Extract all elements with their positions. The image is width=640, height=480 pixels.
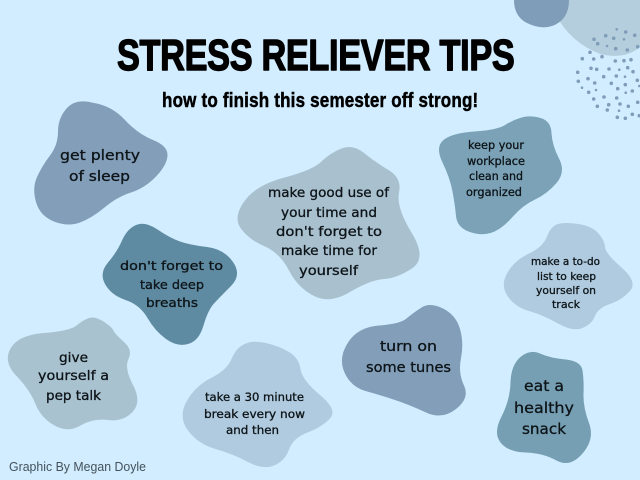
tip: deep breaths xyxy=(103,224,237,345)
tip: good use of time: don't forget to xyxy=(276,225,382,240)
tip: turn on tunes: turn on xyxy=(380,339,437,355)
tip: healthy snack xyxy=(497,352,591,463)
tip: deep breaths: take deep xyxy=(140,277,204,292)
credit: Graphic By Megan Doyle xyxy=(9,459,146,474)
tip: clean workplace: workplace xyxy=(467,154,525,168)
tip: good use of time: make good use of xyxy=(268,186,389,201)
tip: 30 minute break xyxy=(183,342,332,467)
tip: good use of time: make time for xyxy=(281,244,378,259)
tip: good use of time: yourself xyxy=(299,264,358,279)
decoration: light corner blob xyxy=(550,0,640,56)
tip: pep talk: yourself a xyxy=(38,368,109,384)
tip: clean workplace xyxy=(439,116,562,234)
tip: clean workplace: clean and xyxy=(469,169,523,183)
tip: good use of time: your time and xyxy=(281,206,377,221)
tip: 30 minute break: take a 30 minute xyxy=(205,390,304,404)
tip: healthy snack: eat a xyxy=(524,377,564,395)
tip: turn on tunes: some tunes xyxy=(366,360,451,376)
tip: pep talk: pep talk xyxy=(46,388,101,404)
tip: healthy snack: healthy xyxy=(514,399,574,417)
tip: healthy snack: snack xyxy=(522,420,566,438)
tip: to-do list: track xyxy=(552,299,581,311)
tip: deep breaths: don't forget to xyxy=(120,258,223,273)
tip: turn on tunes xyxy=(342,305,466,416)
tip: to-do list xyxy=(504,223,633,329)
tip: clean workplace: organized xyxy=(466,185,522,199)
decoration: dot cluster xyxy=(576,28,640,120)
tip: to-do list: yourself on xyxy=(536,285,596,297)
title: STRESS RELIEVER TIPS xyxy=(117,31,515,80)
tip: to-do list: make a to-do xyxy=(531,256,600,268)
subtitle: how to finish this semester off strong! xyxy=(162,89,478,111)
tip: 30 minute break: break every now xyxy=(204,407,305,421)
tip: to-do list: list to keep xyxy=(537,271,596,283)
tip: pep talk: give xyxy=(59,350,88,366)
tip: good use of time xyxy=(238,147,420,299)
tip: get plenty of sleep xyxy=(34,101,168,225)
tip: pep talk xyxy=(8,317,137,429)
tip: clean workplace: keep your xyxy=(468,138,524,152)
tip: get plenty of sleep: get plenty xyxy=(60,148,140,164)
decoration: dark corner blob xyxy=(514,0,569,27)
tip: deep breaths: breaths xyxy=(146,295,198,310)
tip: 30 minute break: and then xyxy=(226,423,279,437)
tip: get plenty of sleep: of sleep xyxy=(69,169,130,185)
